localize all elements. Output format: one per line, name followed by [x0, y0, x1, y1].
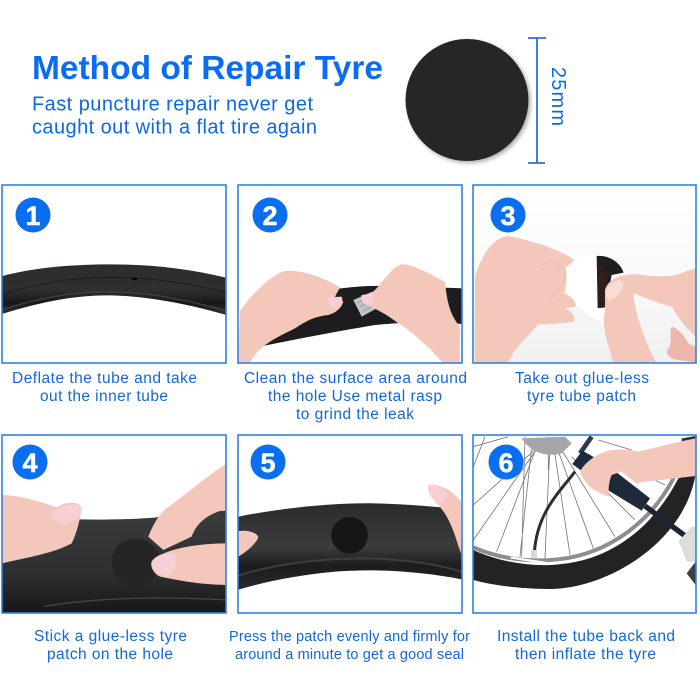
caption 1: Deflate the tube and take — [12, 370, 197, 387]
subtitle: caught out with a flat tire again — [32, 116, 317, 138]
caption 4 — [34, 628, 187, 663]
caption 1 — [12, 370, 197, 405]
photo: inflating the tyre with a pump — [473, 436, 696, 589]
caption 6: then inflate the tyre — [515, 646, 656, 663]
subtitle: Fast puncture repair never get — [32, 94, 313, 116]
panel: step 5 — [229, 435, 470, 663]
panel: step 6 — [473, 435, 696, 663]
caption 2: the hole Use metal rasp — [268, 388, 442, 405]
step badge 3: 3 — [500, 201, 516, 231]
caption 6 — [497, 628, 675, 663]
caption 2 — [244, 370, 467, 423]
step badge 2: 2 — [262, 201, 278, 231]
step badge 1 — [16, 198, 50, 232]
icon: round patch — [406, 39, 528, 161]
title: Method of Repair Tyre — [32, 50, 383, 87]
caption 5: around a minute to get a good seal — [235, 647, 464, 663]
dimension label: 25mm — [547, 67, 569, 126]
panel: step 2 — [238, 185, 467, 423]
subtitle — [32, 94, 317, 138]
photo: patch peeled from backing — [475, 236, 696, 363]
panel: step 1 — [0, 185, 230, 405]
caption 3: Take out glue-less — [515, 370, 649, 387]
caption 2: Clean the surface area around — [244, 370, 467, 387]
photo: tube held in hands — [238, 264, 462, 363]
step badge 4: 4 — [22, 448, 38, 478]
step badge 1: 1 — [25, 201, 41, 231]
caption 4: patch on the hole — [47, 646, 173, 663]
step badge 5 — [250, 444, 286, 480]
caption 3 — [515, 370, 649, 405]
step badge 4 — [12, 444, 48, 480]
photo: inner tube — [0, 264, 230, 316]
dimension bracket — [528, 38, 546, 163]
step badge 6 — [488, 444, 524, 480]
caption 5: Press the patch evenly and firmly for — [229, 629, 470, 645]
photo: sticking patch on the tube — [0, 462, 230, 615]
caption 2: to grind the leak — [296, 406, 414, 423]
photo: patch pressed onto tube — [235, 485, 462, 591]
caption 4: Stick a glue-less tyre — [34, 628, 187, 645]
step badge 2 — [252, 198, 288, 232]
panel: step 4 — [0, 435, 230, 663]
caption 3: tyre tube patch — [527, 388, 636, 405]
step badge 6: 6 — [498, 448, 514, 478]
caption 6: Install the tube back and — [497, 628, 675, 645]
step badge 5: 5 — [260, 448, 276, 478]
step badge 3 — [490, 198, 526, 232]
caption 5 — [229, 629, 470, 663]
caption 1: out the inner tube — [40, 388, 168, 405]
panel: step 3 — [473, 185, 696, 405]
